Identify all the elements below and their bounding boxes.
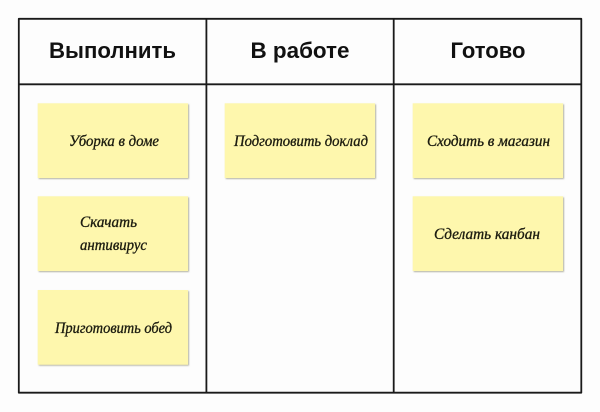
note: Приготовить обед — [38, 290, 188, 365]
heading: В работе: В работе — [250, 38, 350, 63]
note: Уборка в доме — [38, 103, 188, 178]
note: Подготовить доклад — [225, 103, 375, 178]
note: Уборка в доме: Уборка в доме — [69, 133, 159, 150]
note: Сделать канбан: Сделать канбан — [434, 226, 540, 243]
note: Скачать антивирус: антивирус — [80, 237, 147, 254]
column: Выполнить — [38, 38, 188, 365]
note: Скачать антивирус — [38, 196, 188, 271]
note: Приготовить обед: Приготовить обед — [54, 320, 172, 337]
column: Готово — [413, 38, 563, 271]
note: Сходить в магазин — [413, 103, 563, 178]
heading: Выполнить: Выполнить — [49, 38, 176, 63]
column: В работе — [225, 38, 375, 178]
note: Сделать канбан — [413, 196, 563, 271]
note: Сходить в магазин: Сходить в магазин — [427, 133, 550, 150]
heading: Готово: Готово — [450, 38, 526, 63]
note: Подготовить доклад: Подготовить доклад — [233, 133, 368, 150]
note: Скачать антивирус: Скачать — [80, 214, 137, 231]
